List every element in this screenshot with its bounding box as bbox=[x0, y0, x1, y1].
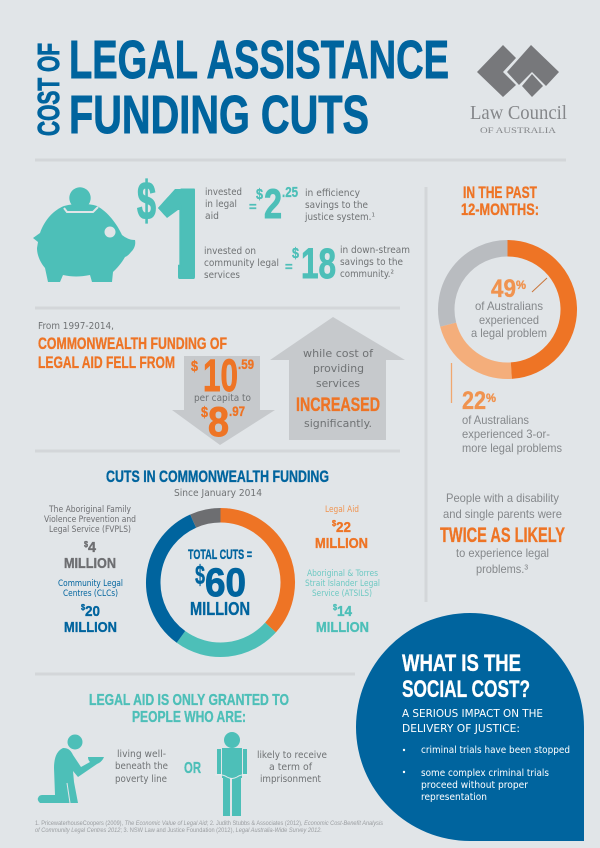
stat: 49 percent bbox=[471, 275, 547, 340]
arrow: down, funding fell: .97 bbox=[229, 403, 245, 419]
label: legal aid 22 million bbox=[315, 505, 368, 552]
text: from 1997-2014: From 1997-2014, bbox=[38, 321, 114, 332]
arrow: up, cost increased: while cost of bbox=[303, 347, 374, 360]
text: efficiency savings: in efficiency bbox=[305, 188, 360, 199]
label: FVPLS 4 million: MILLION bbox=[64, 555, 116, 572]
title bbox=[31, 30, 449, 145]
bullet list: some complex criminal trials bbox=[421, 768, 549, 779]
title: FUNDING CUTS bbox=[69, 85, 369, 145]
heading: legal aid only granted to: PEOPLE WHO ARE: bbox=[132, 709, 246, 726]
label: CLCs 20 million bbox=[58, 579, 123, 636]
title: LEGAL ASSISTANCE bbox=[69, 30, 449, 90]
text: efficiency savings bbox=[304, 188, 375, 223]
stat: 22 percent: experienced 3-or- bbox=[462, 427, 550, 441]
callout: twice as likely: to experience legal bbox=[456, 546, 549, 560]
text: living well-beneath the poverty line bbox=[115, 749, 168, 785]
stat: 22 percent bbox=[452, 363, 562, 455]
arrow: up, cost increased: services bbox=[316, 377, 360, 390]
label: FVPLS 4 million bbox=[44, 505, 136, 572]
label: ATSILS 14 million: Strait Islander Legal bbox=[305, 579, 380, 589]
heading: what is the social cost bbox=[402, 650, 530, 703]
logo: Law Council of Australia: Law Council bbox=[470, 102, 567, 124]
text: community legal services investment: invested on bbox=[204, 246, 256, 257]
heading: what is the social cost: SOCIAL COST? bbox=[402, 676, 530, 703]
stat: 49 percent: % bbox=[516, 278, 526, 292]
label: CLCs 20 million: Centres (CLCs) bbox=[63, 589, 118, 599]
arrow: down, funding fell: .59 bbox=[238, 356, 254, 372]
icon: handcuffed standing person bbox=[215, 732, 248, 816]
bullet list: criminal trials have been stopped bbox=[421, 745, 570, 756]
title: COST OF bbox=[31, 43, 66, 136]
stat: 18 dollars bbox=[285, 240, 336, 288]
text: down-stream savings bbox=[340, 245, 410, 280]
icon: kneeling person begging bbox=[38, 734, 104, 803]
callout: twice as likely: People with a disability bbox=[446, 491, 559, 505]
stat: 49 percent: of Australians bbox=[475, 299, 543, 313]
text: efficiency savings: savings to the bbox=[305, 200, 368, 211]
logo: Law Council of Australia bbox=[470, 45, 567, 135]
stat: total cuts 60 million: MILLION bbox=[190, 599, 250, 619]
heading: in the past 12 months: IN THE PAST bbox=[463, 183, 537, 202]
text: legal aid investment: in legal bbox=[205, 199, 237, 210]
text: legal aid investment: aid bbox=[205, 211, 219, 222]
panel: legal aid eligibility bbox=[38, 692, 327, 816]
label: FVPLS 4 million: Violence Prevention and bbox=[44, 515, 136, 525]
text: likely to receive a term of imprisonment: a term of bbox=[269, 762, 312, 773]
blue quarter-square circle bbox=[356, 613, 584, 841]
stat: 49 percent: experienced bbox=[479, 313, 539, 327]
donut chart: total cuts bbox=[153, 515, 288, 650]
text: community legal services investment bbox=[204, 246, 279, 281]
stat: 22 percent: % bbox=[486, 391, 496, 405]
heading: what is the social cost: WHAT IS THE bbox=[402, 650, 521, 677]
stat: 2.25 dollars: .25 bbox=[282, 184, 298, 201]
text: down-stream savings: in down-stream bbox=[340, 245, 410, 256]
stat: 49 percent: 49 bbox=[491, 275, 516, 303]
text: living well-beneath the poverty line: poverty line bbox=[115, 774, 167, 785]
label: ATSILS 14 million: $ bbox=[333, 603, 337, 612]
callout: twice as likely: and single parents were bbox=[443, 507, 562, 521]
stat: 2.25 dollars: $ bbox=[256, 186, 264, 203]
stat: 18 dollars: $ bbox=[292, 245, 300, 262]
text: legal aid investment bbox=[205, 187, 242, 222]
text: likely to receive a term of imprisonment: imprisonment bbox=[260, 774, 321, 785]
heading: legal aid only granted to: LEGAL AID IS ONLY GRANTED TO bbox=[89, 692, 289, 709]
label: FVPLS 4 million: The Aboriginal Family bbox=[48, 505, 131, 515]
text: likely to receive a term of imprisonment bbox=[257, 750, 327, 785]
text: community legal services investment: services bbox=[204, 270, 240, 281]
arrow: up, cost increased: significantly. bbox=[304, 417, 372, 430]
callout: twice as likely bbox=[440, 491, 565, 576]
bullet list: representation bbox=[421, 792, 487, 803]
text: living well-beneath the poverty line: living well- bbox=[117, 749, 166, 760]
arrow: down, funding fell: 8 bbox=[208, 398, 229, 445]
label: legal aid 22 million: Legal Aid bbox=[325, 505, 359, 515]
label: FVPLS 4 million: $ bbox=[84, 540, 88, 549]
text: down-stream savings: savings to the bbox=[340, 257, 403, 268]
donut chart: legal problems bbox=[446, 248, 569, 371]
arrow: up, cost increased: providing bbox=[313, 362, 364, 375]
icon: piggy bank bbox=[33, 187, 135, 282]
label: CLCs 20 million: $ bbox=[81, 603, 85, 612]
heading: in the past 12 months bbox=[461, 183, 539, 219]
label: FVPLS 4 million: Legal Service (FVPLS) bbox=[49, 525, 131, 535]
text: down-stream savings: community.² bbox=[340, 269, 394, 280]
heading: in the past 12 months: 12-MONTHS: bbox=[461, 200, 539, 219]
text: community legal services investment: community legal bbox=[204, 258, 279, 269]
panel: what is the social cost bbox=[356, 613, 584, 841]
arrow: down, funding fell: $ bbox=[191, 358, 199, 375]
stat: 22 percent: 22 bbox=[462, 387, 486, 415]
panel: past 12 months bbox=[440, 183, 569, 576]
text: living well-beneath the poverty line: beneath the bbox=[115, 761, 168, 772]
arrow: up, cost increased bbox=[270, 317, 405, 440]
stat: total cuts 60 million bbox=[188, 546, 252, 619]
stat: total cuts 60 million: 60 bbox=[205, 561, 246, 605]
arrow: up, cost increased: INCREASED bbox=[296, 395, 380, 416]
label: legal aid 22 million: $ bbox=[332, 519, 336, 528]
text: likely to receive a term of imprisonment: likely to receive bbox=[257, 750, 327, 761]
arrow: down, funding fell: $ bbox=[201, 404, 209, 421]
big dollar one: 1 bbox=[150, 161, 222, 307]
stat: 49 percent: a legal problem bbox=[471, 326, 547, 340]
stat: 22 percent: of Australians bbox=[462, 413, 529, 427]
bullet list bbox=[403, 745, 570, 803]
arrow: down, funding fell: per capita to bbox=[194, 393, 251, 404]
text: legal aid investment: invested bbox=[205, 187, 242, 198]
heading: cuts in commonwealth funding bbox=[106, 468, 329, 499]
footnotes: 1. PricewaterhouseCoopers (2009), The Economic Value of Legal Aid; 2. Judith Stubbs & Associates (2012), Economic Cost-Benefit Analysis bbox=[35, 821, 383, 827]
label: CLCs 20 million: Community Legal bbox=[58, 579, 123, 589]
label: CLCs 20 million: 20 bbox=[85, 603, 100, 620]
heading: legal aid only granted to bbox=[89, 692, 289, 726]
logo: Law Council of Australia: OF AUSTRALIA bbox=[480, 125, 557, 135]
footnotes: of Community Legal Centres 2012; 3. NSW Law and Justice Foundation (2012), Legal Australia-Wide Survey 2012. bbox=[35, 828, 322, 834]
subheading: serious impact: DELIVERY OF JUSTICE: bbox=[402, 722, 520, 735]
label: ATSILS 14 million: 14 bbox=[337, 603, 353, 620]
bullet list: proceed without proper bbox=[421, 780, 529, 791]
heading: commonwealth funding of legal aid: COMMONWEALTH FUNDING OF bbox=[38, 334, 227, 353]
panel: commonwealth funding fell bbox=[38, 317, 405, 445]
heading: cuts in commonwealth funding: Since January 2014 bbox=[174, 488, 262, 499]
arrow: down, funding fell bbox=[172, 350, 275, 445]
big dollar one bbox=[137, 178, 195, 279]
panel: return on investment bbox=[33, 178, 410, 282]
label: FVPLS 4 million: 4 bbox=[88, 539, 97, 556]
subheading: serious impact bbox=[402, 707, 543, 735]
stat: 2.25 dollars: 2 bbox=[264, 180, 282, 227]
stat: 18 dollars: 18 bbox=[301, 240, 336, 288]
label: ATSILS 14 million: Service (ATSILS) bbox=[312, 589, 372, 599]
stat: 2.25 dollars: = bbox=[249, 199, 257, 214]
label: ATSILS 14 million bbox=[305, 569, 380, 636]
stat: total cuts 60 million: $ bbox=[195, 560, 205, 590]
stat: total cuts 60 million: TOTAL CUTS = bbox=[188, 546, 252, 562]
footnotes bbox=[35, 821, 383, 834]
big dollar one: $ bbox=[137, 171, 156, 231]
arrow: down, funding fell: 10 bbox=[203, 350, 238, 401]
heading: commonwealth funding of legal aid: LEGAL AID FELL FROM bbox=[38, 353, 175, 372]
subheading: serious impact: A SERIOUS IMPACT ON THE bbox=[402, 707, 543, 720]
heading: cuts in commonwealth funding: CUTS IN COMMONWEALTH FUNDING bbox=[106, 468, 329, 486]
label: legal aid 22 million: 22 bbox=[336, 519, 351, 536]
stat: 18 dollars: = bbox=[285, 259, 293, 274]
label: ATSILS 14 million: Aboriginal & Torres bbox=[307, 569, 378, 579]
label: ATSILS 14 million: MILLION bbox=[316, 619, 369, 636]
text: efficiency savings: justice system.¹ bbox=[304, 212, 375, 223]
stat: 2.25 dollars bbox=[249, 180, 298, 227]
label: CLCs 20 million: MILLION bbox=[64, 619, 117, 636]
callout: twice as likely: problems.³ bbox=[476, 562, 528, 576]
label: legal aid 22 million: MILLION bbox=[315, 535, 368, 552]
text: or: OR bbox=[184, 760, 201, 777]
stat: 22 percent: more legal problems bbox=[462, 441, 562, 455]
heading: commonwealth funding of legal aid bbox=[38, 334, 227, 372]
panel: cuts in commonwealth funding bbox=[44, 468, 380, 650]
